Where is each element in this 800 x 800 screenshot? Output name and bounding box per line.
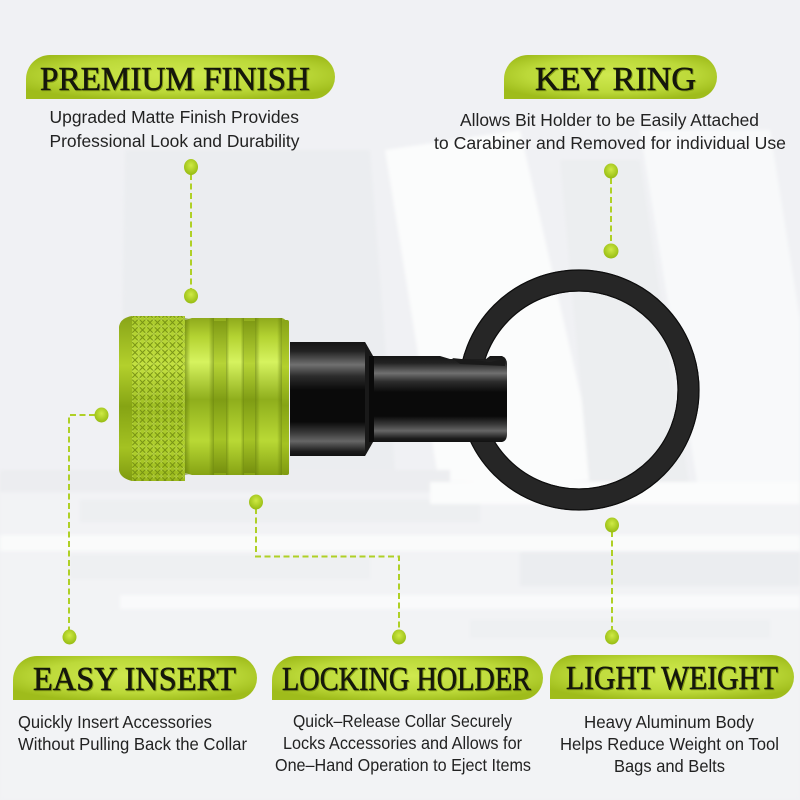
description: Quick–Release Collar Securely (293, 711, 512, 731)
dot: light weight top (605, 518, 619, 532)
heading: KEY RING (535, 61, 696, 98)
heading: PREMIUM FINISH (40, 61, 310, 98)
dot: key ring bottom (604, 244, 618, 258)
description: Without Pulling Back the Collar (18, 734, 247, 754)
connector: light weight (611, 531, 613, 632)
green collar (185, 318, 289, 475)
heading: LOCKING HOLDER (282, 661, 532, 698)
description: Upgraded Matte Finish Provides (50, 107, 299, 127)
dot: premium top (184, 159, 198, 175)
dot: locking top (249, 494, 263, 510)
dot: premium bottom (184, 288, 198, 304)
description: Allows Bit Holder to be Easily Attached (460, 110, 759, 130)
description: Quickly Insert Accessories (18, 712, 212, 732)
callout: locking holder (272, 656, 543, 775)
heading pill (13, 656, 257, 700)
description: Helps Reduce Weight on Tool (560, 734, 779, 754)
heading: LIGHT WEIGHT (566, 660, 778, 697)
dot: locking bottom (392, 630, 406, 644)
dot: light weight bottom (605, 630, 619, 644)
description: Locks Accessories and Allows for (283, 733, 522, 753)
description: Bags and Belts (614, 756, 725, 776)
dot: easy insert bottom (62, 630, 76, 644)
description: One–Hand Operation to Eject Items (275, 755, 531, 775)
key ring loop (459, 270, 699, 510)
callout: premium finish (26, 55, 335, 151)
heading: EASY INSERT (33, 661, 236, 698)
description: Heavy Aluminum Body (584, 712, 754, 732)
black shaft (290, 342, 507, 456)
heading pill (504, 55, 717, 99)
description: to Carabiner and Removed for individual Use (434, 133, 786, 153)
callout: key ring (434, 55, 786, 153)
product: bit holder (119, 270, 699, 510)
connector: premium finish (190, 174, 192, 290)
dot: key ring top (604, 164, 618, 178)
connector: easy insert (69, 415, 95, 632)
heading pill (550, 655, 794, 699)
callout: light weight (550, 655, 794, 776)
heading pill (272, 656, 543, 700)
heading pill (26, 55, 335, 99)
callout: easy insert (13, 656, 257, 754)
knurled grip (119, 316, 185, 481)
connector: key ring (610, 178, 612, 245)
description: Professional Look and Durability (50, 131, 300, 151)
dot: easy insert top (94, 408, 108, 422)
connector: locking holder (256, 508, 399, 632)
